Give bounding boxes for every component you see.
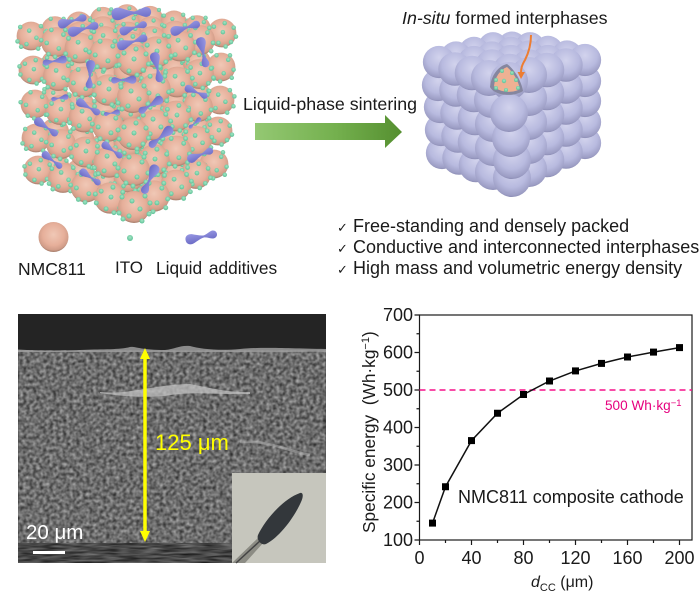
legend label: ITO: ITO xyxy=(115,258,143,277)
bullet: conductive: ✓ xyxy=(337,242,348,257)
y axis title: ) xyxy=(359,331,379,337)
label: 500 Wh/kg: −1 xyxy=(671,398,682,409)
feature list xyxy=(337,216,699,278)
data line xyxy=(432,348,680,523)
thickness arrow xyxy=(140,348,150,542)
y axis tick labels: 100 xyxy=(383,530,413,550)
y axis title: −1 xyxy=(360,337,372,350)
y axis tick labels xyxy=(383,305,413,550)
bullet: free-standing: Free-standing and densely packed xyxy=(353,216,629,236)
bullet: high energy density: High mass and volumetric energy density xyxy=(353,258,682,278)
arrow: pointer to interphases xyxy=(518,35,531,79)
inset: photo of free-standing cathode xyxy=(232,473,326,563)
label: 125 µm: 125 μm xyxy=(155,430,229,455)
legend label: NMC811: NMC811 xyxy=(18,259,86,279)
label: 500 Wh/kg: 500 Wh·kg xyxy=(605,398,671,413)
chart: specific energy vs current collector thickness xyxy=(359,305,695,594)
x axis title: CC xyxy=(540,582,556,594)
icon: ITO particle xyxy=(127,235,133,241)
liquid additives bridging the particles xyxy=(32,5,215,196)
x axis tick labels: 80 xyxy=(513,548,534,568)
y axis title: Specific energy (Wh·kg xyxy=(359,350,379,533)
x axis tick labels: 120 xyxy=(560,548,591,568)
bullet: conductive: Conductive and interconnected interphases xyxy=(353,237,699,257)
y axis tick labels: 700 xyxy=(383,305,413,325)
data markers xyxy=(429,344,683,527)
illustration: sintered cube with interphases xyxy=(422,32,601,197)
x axis title: (μm) xyxy=(556,574,593,591)
textured electrode cross-section xyxy=(18,350,326,544)
plot frame and ticks xyxy=(414,315,692,545)
y axis tick labels: 600 xyxy=(383,342,413,362)
x axis title: d xyxy=(531,574,541,591)
bullet: free-standing: ✓ xyxy=(337,221,348,236)
x axis tick labels: 0 xyxy=(414,548,425,568)
process label: Liquid-phase sintering xyxy=(243,94,417,114)
y axis tick labels: 500 xyxy=(383,380,413,400)
heading: in-situ formed interphases: In-situ formed interphases xyxy=(402,8,608,28)
legend: NMC811, ITO, liquid additives xyxy=(18,222,277,279)
y axis tick labels: 200 xyxy=(383,492,413,512)
x axis tick labels: 200 xyxy=(664,548,695,568)
legend label: liquid additives: Liquid additives xyxy=(156,258,277,278)
bullet: high energy density: ✓ xyxy=(337,263,348,278)
chart annotation: NMC811 composite cathode xyxy=(458,487,684,507)
y axis tick labels: 400 xyxy=(383,418,413,438)
arrow: sintering direction xyxy=(255,115,402,148)
y axis tick labels: 300 xyxy=(383,455,413,475)
substrate band xyxy=(18,543,250,563)
x axis tick labels: 160 xyxy=(612,548,643,568)
reference line: 500 Wh/kg xyxy=(420,389,692,391)
cutaway: interphases inside sphere xyxy=(490,64,523,95)
panel: SEM cross-section image xyxy=(18,314,326,563)
icon: liquid additive xyxy=(185,229,218,245)
scale bar xyxy=(33,551,65,554)
illustration: NMC811 particle cube before sintering xyxy=(15,4,238,224)
icon: NMC811 sphere xyxy=(38,222,68,252)
x axis tick labels xyxy=(414,548,695,568)
label: 20 µm: 20 μm xyxy=(26,521,83,544)
x axis tick labels: 40 xyxy=(461,548,482,568)
